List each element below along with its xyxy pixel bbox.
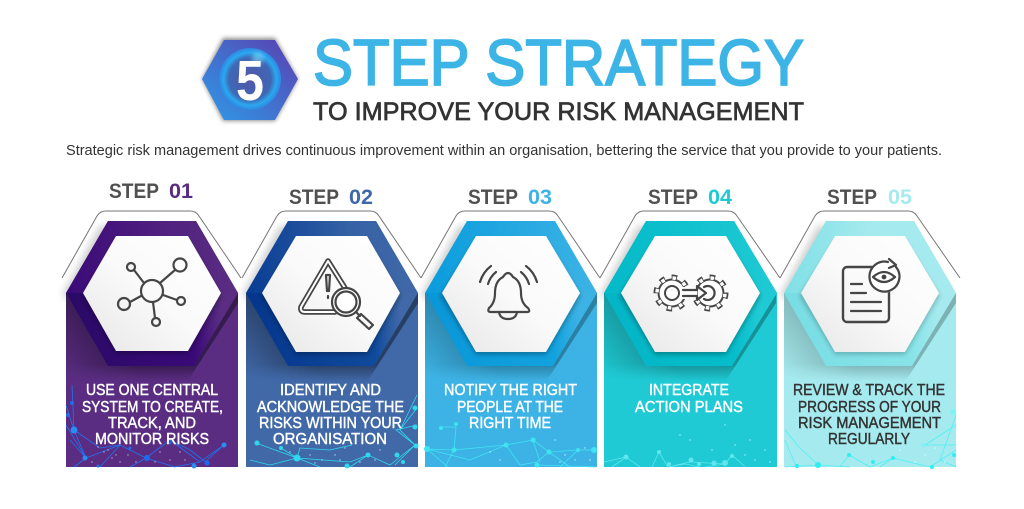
step 04 network decoration bbox=[604, 424, 771, 467]
panel: step 02 bbox=[242, 185, 421, 468]
step 02 text: ACKNOWLEDGE THE bbox=[257, 399, 404, 416]
panel: step 03 bbox=[421, 185, 600, 468]
step 01 card bbox=[62, 221, 238, 467]
icon: warning triangle with magnifier bbox=[301, 261, 373, 329]
step 02 network decoration bbox=[250, 395, 418, 468]
icon: network hub bbox=[118, 258, 186, 326]
step 05 text: RISK MANAGEMENT bbox=[798, 415, 941, 432]
step 02 text bbox=[257, 382, 404, 448]
step 02 text: ORGANISATION bbox=[273, 431, 387, 448]
step 05 outline bbox=[780, 211, 960, 278]
step 03 text: NOTIFY THE RIGHT bbox=[444, 382, 577, 399]
step 05 white hexagon bbox=[799, 236, 940, 355]
step 05 network decoration bbox=[785, 409, 956, 469]
icon: document with eye bbox=[843, 259, 900, 322]
step 04 card bbox=[600, 221, 777, 467]
step 01 text: TRACK, AND bbox=[108, 415, 196, 432]
step 02 heading: 02 bbox=[349, 185, 373, 209]
step 03 text: RIGHT TIME bbox=[469, 415, 551, 432]
step 03 network decoration bbox=[424, 422, 597, 468]
panel: step 04 bbox=[600, 185, 780, 467]
step 04 text: ACTION PLANS bbox=[635, 399, 743, 416]
step 05 heading: STEP bbox=[827, 185, 877, 209]
title: STEP STRATEGY bbox=[313, 26, 804, 99]
step 02 card bbox=[242, 221, 418, 467]
step 02 outline bbox=[242, 211, 421, 278]
step 01 heading: STEP bbox=[109, 179, 159, 203]
step 04 heading: 04 bbox=[708, 185, 732, 209]
step 05 text: REGULARLY bbox=[828, 431, 910, 448]
step 01 white hexagon bbox=[82, 236, 222, 354]
step 03 heading: STEP bbox=[468, 185, 518, 209]
step 03 card bbox=[421, 221, 597, 467]
step 04 text bbox=[635, 382, 743, 416]
icon: ringing bell bbox=[480, 266, 537, 319]
step 04 heading: STEP bbox=[648, 185, 698, 209]
step 04 heading bbox=[648, 185, 732, 209]
step 05 card bbox=[780, 221, 956, 467]
subtitle: TO IMPROVE YOUR RISK MANAGEMENT bbox=[313, 98, 804, 126]
step 01 text: SYSTEM TO CREATE, bbox=[82, 399, 223, 416]
step 02 heading: STEP bbox=[289, 185, 339, 209]
step 05 text bbox=[793, 382, 945, 448]
step 04 text: INTEGRATE bbox=[649, 382, 729, 399]
step 01 text: MONITOR RISKS bbox=[95, 431, 209, 448]
step 05 text: PROGRESS OF YOUR bbox=[798, 399, 941, 416]
icon: gears with arrow bbox=[656, 277, 726, 309]
step 01 heading: 01 bbox=[169, 179, 193, 203]
step 02 white hexagon bbox=[261, 236, 401, 355]
step 02 text: IDENTIFY AND bbox=[280, 382, 381, 399]
step 02 heading bbox=[289, 185, 373, 209]
step 01 text: USE ONE CENTRAL bbox=[86, 382, 218, 399]
step 01 heading bbox=[109, 179, 193, 203]
step 01 text bbox=[82, 382, 223, 448]
step 03 white hexagon bbox=[440, 236, 581, 355]
step 05 heading bbox=[827, 185, 912, 209]
step 01 network decoration bbox=[66, 385, 226, 468]
step 02 text: RISKS WITHIN YOUR bbox=[259, 415, 402, 432]
step 04 white hexagon bbox=[619, 236, 761, 355]
step 03 text: PEOPLE AT THE bbox=[457, 399, 563, 416]
step 03 text bbox=[444, 382, 577, 432]
step 01 outline bbox=[62, 211, 241, 278]
title badge: hexagon 5 bbox=[202, 38, 298, 121]
step 04 outline bbox=[600, 211, 780, 278]
step 05 heading: 05 bbox=[888, 185, 912, 209]
step 05 text: REVIEW & TRACK THE bbox=[793, 382, 945, 399]
intro text: Strategic risk management drives continuous improvement within an organisation, bettering the service that you provide to your patients. bbox=[66, 143, 942, 159]
step 03 outline bbox=[421, 211, 600, 278]
step 03 heading bbox=[468, 185, 552, 209]
step 03 heading: 03 bbox=[528, 185, 552, 209]
panel: step 05 bbox=[780, 185, 960, 469]
panel: step 01 bbox=[62, 179, 241, 468]
title badge: hexagon 5: 5 bbox=[236, 49, 264, 113]
